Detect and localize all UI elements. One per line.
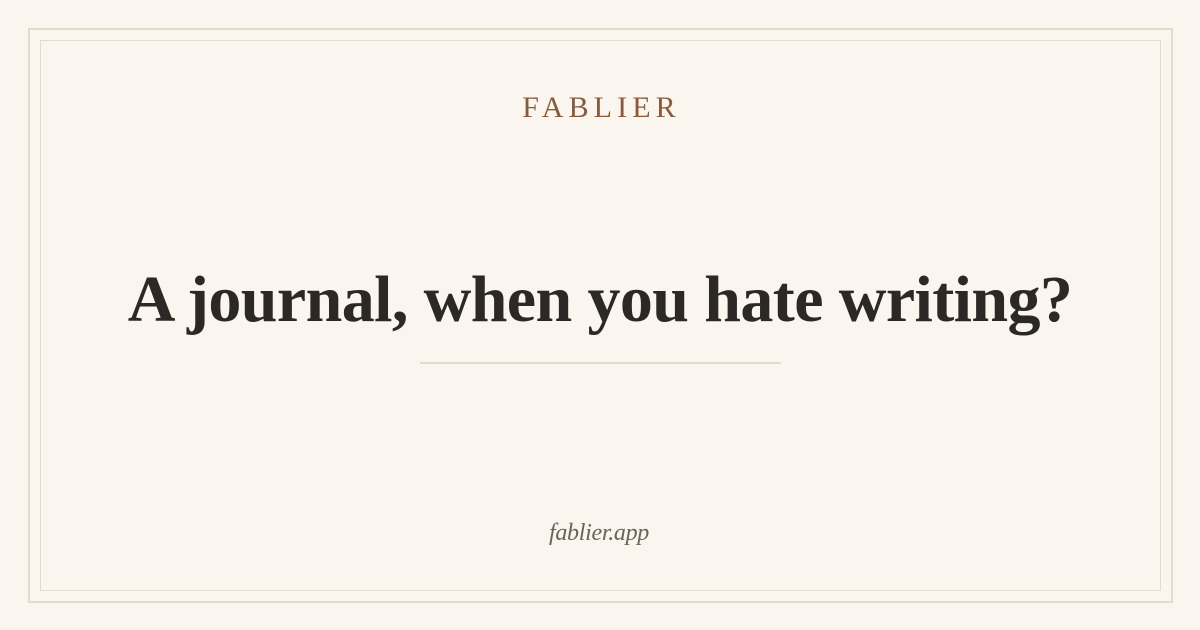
brand name: FABLIER: [522, 91, 681, 124]
title: A journal, when you hate writing?: [128, 263, 1072, 336]
site url: fablier.app: [549, 520, 649, 546]
divider: [420, 362, 781, 364]
